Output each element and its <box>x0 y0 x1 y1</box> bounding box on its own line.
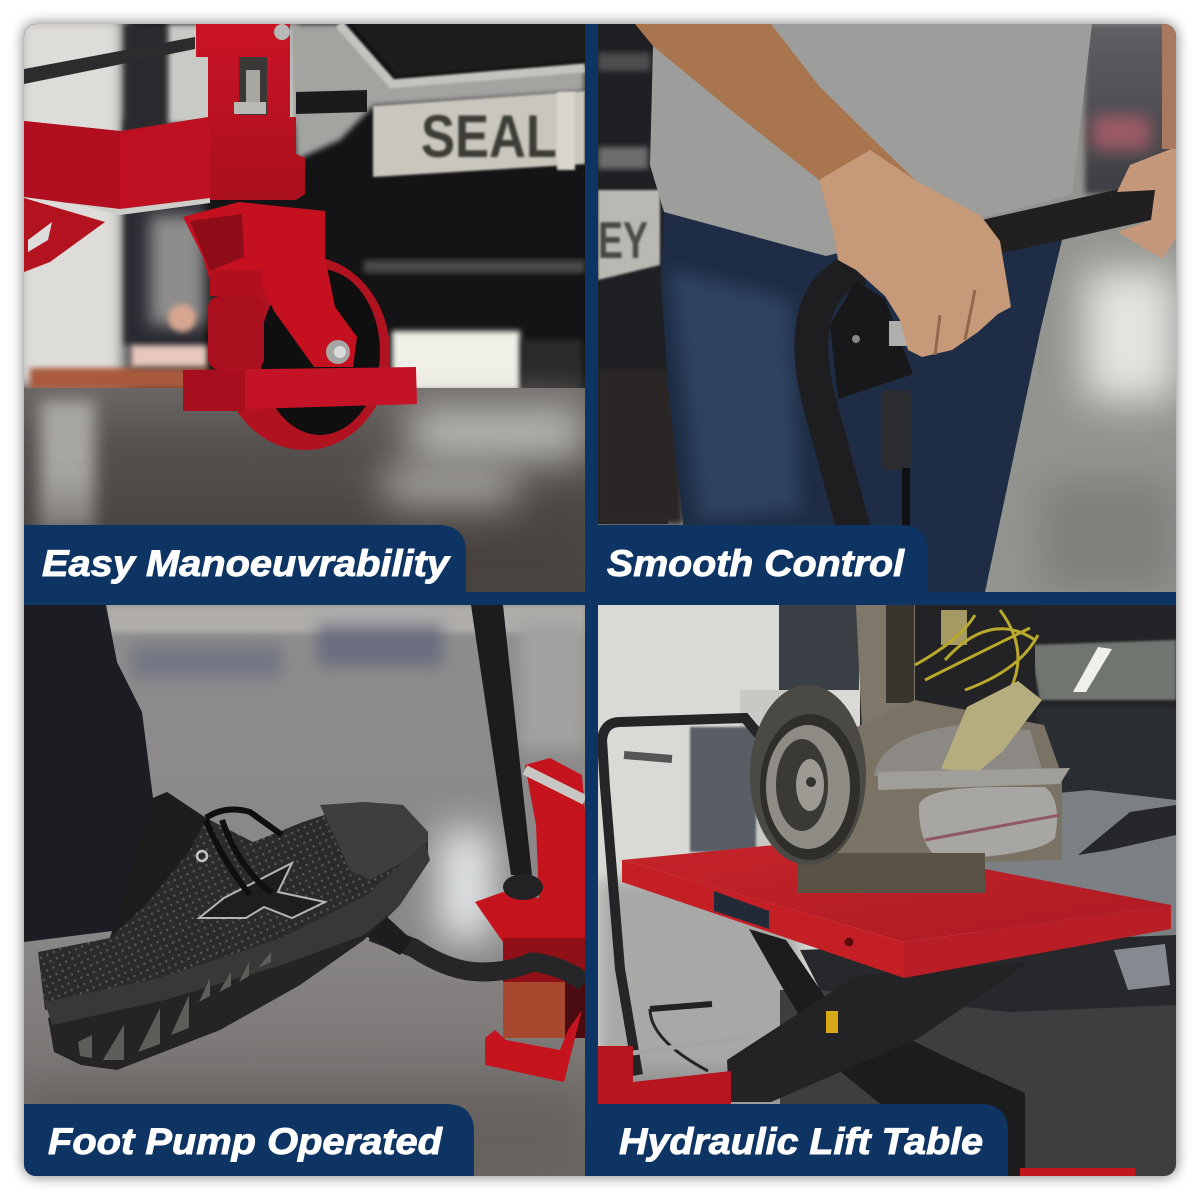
engine <box>750 605 1070 893</box>
pedal <box>372 932 585 982</box>
horizontal divider <box>24 592 1176 605</box>
base <box>598 1046 731 1104</box>
label: smooth control: Smooth Control <box>607 543 905 584</box>
far plate <box>598 190 660 280</box>
label: hydraulic lift table <box>585 1104 1008 1176</box>
person: jeans <box>661 212 1062 592</box>
caster bracket <box>183 202 417 411</box>
scissor lift <box>727 929 1029 1176</box>
panel: smooth control photo <box>598 24 1180 592</box>
pump column <box>471 605 532 875</box>
panel: foot pump photo <box>24 605 585 1176</box>
person: arm <box>635 24 930 270</box>
number plate: SEAL <box>421 103 557 170</box>
handle frame <box>602 718 760 1075</box>
label: smooth control <box>598 525 928 592</box>
shoe <box>38 792 430 1070</box>
far plate: EY <box>598 212 648 270</box>
sole tread <box>48 905 400 1070</box>
vertical divider <box>585 24 598 1176</box>
label: easy manoeuvrability <box>24 525 466 592</box>
person: hand <box>819 150 1011 357</box>
handle bar <box>990 201 1151 237</box>
hose <box>296 90 367 114</box>
jack body <box>475 758 585 1082</box>
leg <box>24 605 153 942</box>
person: t-shirt <box>640 24 1092 256</box>
wheel <box>208 256 390 450</box>
label: easy manoeuvrability: Easy Manoeuvrability <box>42 543 452 584</box>
background car <box>598 605 1176 1176</box>
floor <box>24 388 585 592</box>
panel: easy manoeuvrability photo <box>14 14 585 592</box>
label: hydraulic lift table: Hydraulic Lift Table <box>619 1121 983 1162</box>
midsole <box>45 842 430 1025</box>
red table <box>622 845 1171 978</box>
label: foot pump operated: Foot Pump Operated <box>48 1121 443 1162</box>
push rod <box>24 37 195 84</box>
curved handle <box>811 268 913 530</box>
panel: hydraulic lift table photo <box>598 605 1176 1176</box>
number plate <box>373 91 585 177</box>
label: foot pump operated <box>24 1104 474 1176</box>
red frame <box>24 24 305 272</box>
person: other hand <box>1117 147 1176 259</box>
